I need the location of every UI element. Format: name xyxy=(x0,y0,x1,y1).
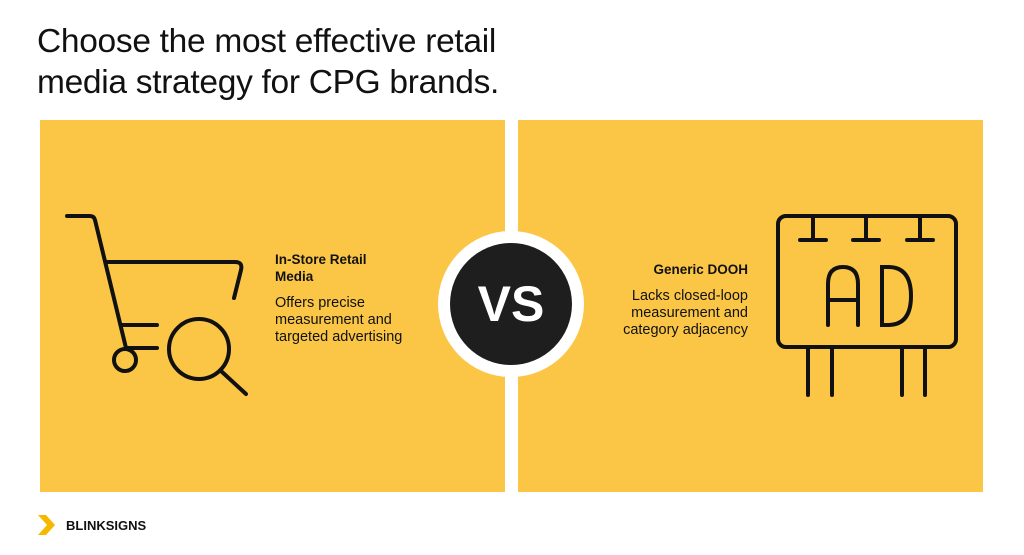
panel: in-store retail media xyxy=(40,120,505,492)
icon: cart with magnifier xyxy=(65,214,248,396)
logo xyxy=(38,515,146,535)
icon: chevron xyxy=(38,515,55,535)
text: in-store retail media: measurement and xyxy=(275,312,392,328)
text: in-store retail media xyxy=(275,252,402,345)
icon: billboard xyxy=(776,214,958,397)
VS badge xyxy=(438,231,584,377)
title xyxy=(37,23,499,101)
text: generic DOOH xyxy=(623,262,748,338)
logo: BLINKSIGNS xyxy=(66,518,146,532)
title: Choose the most effective retail xyxy=(37,23,496,60)
text: in-store retail media: Media xyxy=(275,269,313,284)
text: in-store retail media: Offers precise xyxy=(275,295,365,311)
text: in-store retail media: In-Store Retail xyxy=(275,252,367,267)
text: generic DOOH: category adjacency xyxy=(623,322,748,338)
text: generic DOOH: Generic DOOH xyxy=(653,262,748,277)
VS badge: VS xyxy=(478,276,544,332)
text: in-store retail media: targeted advertising xyxy=(275,329,402,345)
text: generic DOOH: measurement and xyxy=(631,305,748,321)
title: media strategy for CPG brands. xyxy=(37,64,499,101)
text: generic DOOH: Lacks closed-loop xyxy=(632,288,748,304)
panel: generic DOOH xyxy=(518,120,983,492)
